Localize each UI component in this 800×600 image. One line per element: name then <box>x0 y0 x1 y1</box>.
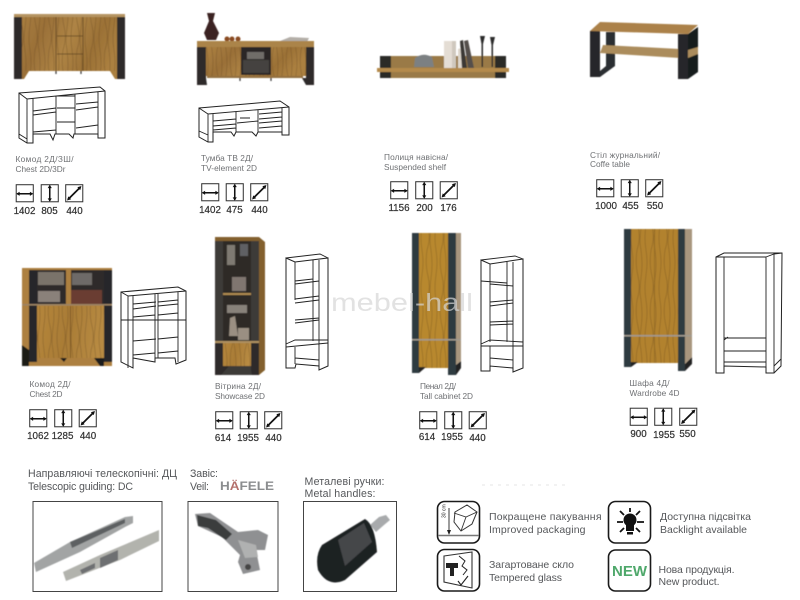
caption: tall cabinet 2D: Tall cabinet 2D <box>420 391 473 401</box>
text: improved packaging: Покращене пакування <box>489 511 602 523</box>
photo: tall cabinet 2D <box>412 233 461 375</box>
image box: knurled handle <box>304 502 396 592</box>
product: wardrobe 4D <box>624 229 782 441</box>
product: suspended shelf <box>377 36 509 214</box>
caption: chest 2D/3Dr: Chest 2D/3Dr <box>16 164 66 174</box>
icon: light bulb <box>608 502 650 543</box>
product: chest 2D/3Dr <box>14 14 125 217</box>
icon: packaging <box>438 502 480 543</box>
caption: wardrobe 4D: Шафа 4Д/ <box>630 378 670 388</box>
text: new product: Нова продукція. <box>658 564 734 576</box>
dimensions: 1000 455 550 <box>595 180 664 212</box>
dimensions: 614 1955 440: 1955 <box>237 433 259 444</box>
dimensions: 614 1955 440: 440 <box>469 433 486 444</box>
photo: coffee table <box>590 22 698 79</box>
dimensions: 900 1955 550: 550 <box>679 429 696 440</box>
caption: chest 2D/3Dr: Комод 2Д/ЗШ/ <box>16 154 74 164</box>
dimensions: 1062 1285 440: 1285 <box>52 431 74 442</box>
hardware: telescopic guiding <box>28 468 177 592</box>
heading: hinge: Завіс: <box>190 468 218 480</box>
caption: suspended shelf: Полиця навісна/ <box>384 152 449 162</box>
dimensions: 1402 475 440: 475 <box>226 205 243 216</box>
caption: chest 2D: Chest 2D <box>30 389 62 399</box>
dimensions: 1000 455 550: 455 <box>622 201 639 212</box>
caption: showcase 2D: Вітрина 2Д/ <box>215 381 262 391</box>
caption: suspended shelf: Suspended shelf <box>384 162 447 172</box>
dimensions: 1062 1285 440: 1062 <box>27 431 49 442</box>
dimensions: 1402 805 440: 1402 <box>14 206 35 217</box>
caption: TV element: Тумба ТВ 2Д/ <box>201 153 254 163</box>
dimensions: 1402 475 440 <box>199 184 268 216</box>
icon: packaging: 30 cm <box>442 504 448 518</box>
dimensions: 1402 805 440 <box>14 185 83 217</box>
photo: chest 2D <box>22 268 112 366</box>
feature: tempered glass <box>438 550 574 591</box>
hardware: metal handles <box>304 476 396 592</box>
product: chest 2D <box>22 268 186 442</box>
icon: tempered glass <box>438 550 480 591</box>
text: tempered glass: Tempered glass <box>489 572 562 584</box>
caption: TV element: TV-element 2D <box>201 163 257 173</box>
text: backlight available: Backlight available <box>660 524 747 536</box>
image box: drawer runners <box>33 502 162 592</box>
photo: wardrobe 4D <box>624 229 692 371</box>
photo: showcase 2D <box>215 237 265 375</box>
line drawing: chest 2D/3Dr <box>19 87 105 143</box>
heading: metal handles: Metal handles: <box>304 488 376 500</box>
dimensions: 1062 1285 440 <box>27 410 97 442</box>
dimensions: 1062 1285 440: 440 <box>80 431 97 442</box>
dimensions: 614 1955 440 <box>419 412 486 444</box>
dimensions: 1156 200 176: 176 <box>440 203 457 214</box>
photo: chest 2D/3Dr <box>14 14 125 79</box>
text: backlight available: Доступна підсвітка <box>660 511 751 523</box>
dimensions: 614 1955 440: 614 <box>419 432 436 443</box>
dimensions: 1156 200 176: 1156 <box>388 203 410 214</box>
line drawing: tall cabinet 2D <box>481 256 523 372</box>
logo: Hafele: HÄFELE <box>220 480 274 493</box>
photo: TV element <box>197 13 314 85</box>
feature: improved packaging <box>438 502 602 543</box>
caption: tall cabinet 2D: Пенал 2Д/ <box>420 381 457 391</box>
dimensions: 614 1955 440 <box>215 412 282 444</box>
text: tempered glass: Загартоване скло <box>489 559 574 571</box>
caption: showcase 2D: Showcase 2D <box>215 391 265 401</box>
line drawing: TV element <box>199 101 289 142</box>
dimensions: 1000 455 550: 1000 <box>595 201 617 212</box>
dimensions: 1402 805 440: 440 <box>66 206 83 217</box>
product: tall cabinet 2D <box>412 233 523 444</box>
line drawing: chest 2D <box>121 287 186 368</box>
caption: chest 2D: Комод 2Д/ <box>30 379 71 389</box>
dimensions: 900 1955 550 <box>630 408 697 441</box>
heading: hinge: Veil: <box>190 481 209 493</box>
line drawing: wardrobe 4D <box>716 253 782 373</box>
heading: telescopic guiding: Telescopic guiding: DC <box>28 481 133 493</box>
text: improved packaging: Improved packaging <box>489 524 586 536</box>
feature: new product <box>608 550 734 591</box>
photo: suspended shelf <box>377 36 509 78</box>
dimensions: 614 1955 440: 614 <box>215 433 232 444</box>
dimensions: 900 1955 550: 900 <box>630 429 647 440</box>
heading: metal handles: Металеві ручки: <box>304 476 384 488</box>
text: new product: New product. <box>658 576 720 588</box>
product: coffee table <box>590 22 698 212</box>
dimensions: 614 1955 440: 440 <box>265 433 282 444</box>
watermark: mebel-hall <box>331 289 473 317</box>
dimensions: 900 1955 550: 1955 <box>653 430 675 441</box>
line drawing: showcase 2D <box>286 254 328 370</box>
image box: hinge <box>188 502 278 592</box>
dimensions: 614 1955 440: 1955 <box>441 432 463 443</box>
feature: backlight available <box>608 502 751 543</box>
dimensions: 1000 455 550: 550 <box>647 201 664 212</box>
dimensions: 1402 805 440: 805 <box>41 206 58 217</box>
dimensions: 1402 475 440: 440 <box>251 205 268 216</box>
caption: coffee table: Coffe table <box>590 159 630 169</box>
icon: NEW badge: NEW <box>612 563 648 580</box>
caption: coffee table: Стіл журнальний/ <box>590 150 661 160</box>
dimensions: 1156 200 176 <box>388 182 457 214</box>
hardware: hinge <box>188 468 278 592</box>
product: TV element <box>197 13 314 216</box>
heading: telescopic guiding: Направляючі телескопічні: ДЦ <box>28 468 177 480</box>
dimensions: 1156 200 176: 200 <box>416 203 433 214</box>
caption: wardrobe 4D: Wardrobe 4D <box>630 388 680 398</box>
product: showcase 2D <box>215 237 328 444</box>
dimensions: 1402 475 440: 1402 <box>199 205 221 216</box>
